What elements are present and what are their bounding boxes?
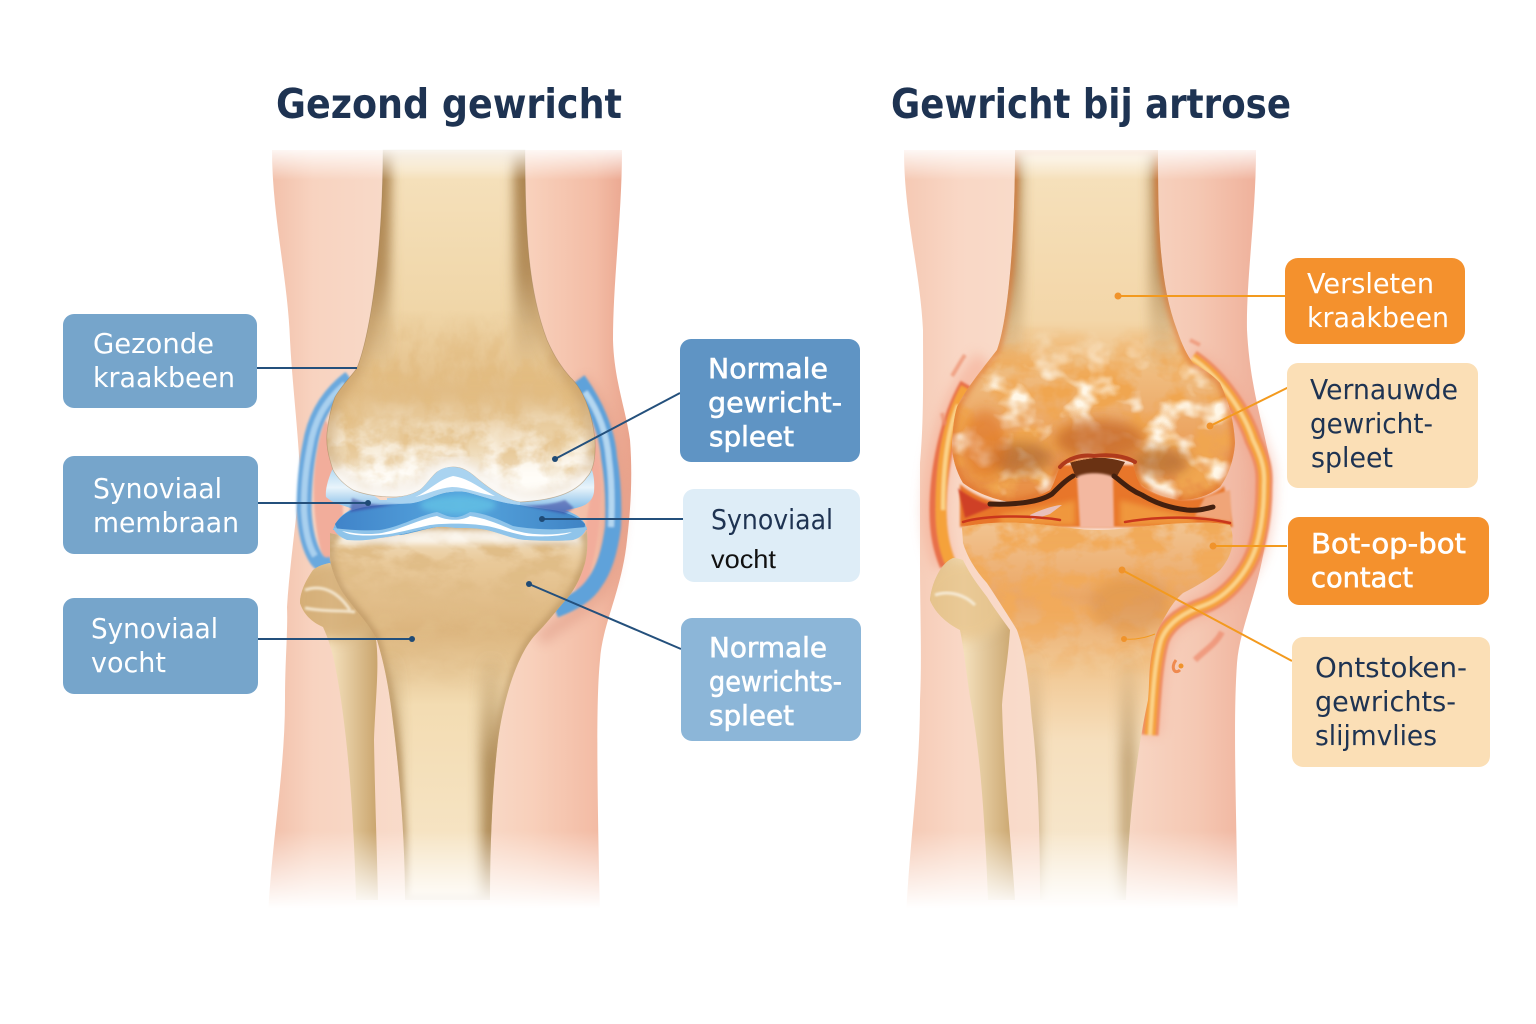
label: bot-op-bot contact: contact [1311, 561, 1413, 594]
label: versleten kraakbeen: Versleten [1307, 267, 1434, 300]
label: vernauwde gewrichtspleet: spleet [1311, 441, 1393, 474]
label: normale gewrichtspleet: Normale [708, 352, 828, 385]
label: normale gewrichtsspleet: Normale [709, 631, 827, 664]
label: vernauwde gewrichtspleet: gewricht- [1310, 407, 1433, 440]
skin artrose [904, 150, 1271, 915]
label: gezonde kraakbeen: kraakbeen [93, 361, 235, 394]
label: normale gewrichtspleet: spleet [709, 420, 794, 453]
vernauwde gewrichtsspleet [963, 455, 1230, 523]
label: synoviaal vocht links: vocht [91, 646, 166, 679]
gewrichtsspleet artrose [958, 458, 1233, 528]
gewrichtsvocht [326, 462, 594, 535]
dijbeen [326, 150, 596, 502]
label: gezonde kraakbeen: Gezonde [93, 327, 214, 360]
kuitbeen artrose [930, 558, 1015, 900]
kraakbeen dijbeen [387, 467, 520, 505]
label: bot-op-bot contact [1288, 517, 1489, 605]
label: ontstoken gewrichtsslijmvlies: Ontstoken- [1315, 651, 1467, 684]
label: versleten kraakbeen [1285, 258, 1465, 344]
label: synoviaal vocht rechts: vocht [711, 544, 777, 574]
inner salmon space [314, 420, 601, 590]
label: synoviaal vocht rechts: Synoviaal [711, 503, 833, 536]
scheenbeen artrose [962, 522, 1232, 896]
label: vernauwde gewrichtspleet [1287, 363, 1478, 488]
kraakbeen scheenbeen [333, 512, 587, 541]
illustration: knie bij artrose [904, 130, 1271, 920]
label: ontstoken gewrichtsslijmvlies: gewrichts- [1315, 685, 1456, 718]
shadow on skin [540, 380, 616, 640]
label: ontstoken gewrichtsslijmvlies: slijmvlies [1315, 719, 1437, 752]
title: gezond gewricht: Gezond gewricht [276, 80, 622, 128]
label: versleten kraakbeen: kraakbeen [1307, 301, 1449, 334]
label: bot-op-bot contact: Bot-op-bot [1311, 527, 1466, 560]
label: synoviaal membraan: Synoviaal [93, 472, 222, 505]
title: gewricht bij artrose: Gewricht bij artrose [891, 80, 1291, 128]
label: synoviaal vocht links: Synoviaal [91, 612, 218, 645]
label: normale gewrichtsspleet: spleet [709, 699, 794, 732]
label: synoviaal vocht rechts [683, 489, 860, 582]
ontstoken slijmvlies [934, 340, 1264, 735]
label: synoviaal membraan [63, 456, 258, 554]
label: gezonde kraakbeen [63, 314, 257, 408]
label: synoviaal vocht links [63, 598, 258, 694]
label: normale gewrichtsspleet: gewrichts- [709, 665, 842, 698]
label: normale gewrichtspleet [680, 339, 860, 462]
skin [268, 150, 631, 915]
label: normale gewrichtspleet: gewricht- [708, 386, 842, 419]
kuitbeen [300, 563, 378, 900]
illustration: gezonde knie [268, 130, 631, 920]
label: ontstoken gewrichtsslijmvlies [1292, 637, 1490, 767]
dijbeen artrose [952, 150, 1235, 502]
label: vernauwde gewrichtspleet: Vernauwde [1310, 373, 1458, 406]
label: synoviaal membraan: membraan [93, 506, 239, 539]
label: normale gewrichtsspleet [681, 618, 861, 741]
synoviaal kapsel [304, 378, 613, 610]
verbindingslijnen links [257, 368, 683, 649]
verbindingslijnen rechts [1114, 292, 1292, 668]
scheenbeen [325, 525, 595, 920]
